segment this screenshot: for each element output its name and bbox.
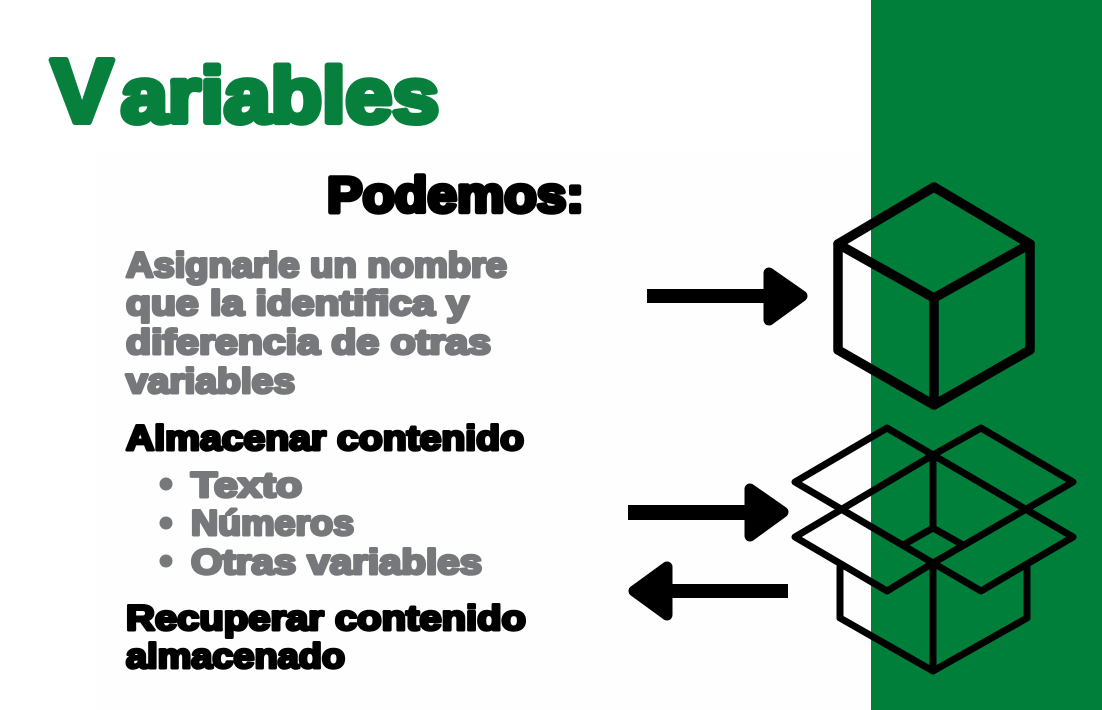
list: content types: Números <box>191 504 354 543</box>
icon: closed box <box>838 187 1030 405</box>
text block: assign a name: que la identifica y <box>126 284 470 323</box>
text block: assign a name: Asignarle un nombre <box>126 246 507 285</box>
icon: open box <box>795 428 1073 671</box>
panel: green band <box>871 0 1102 710</box>
heading: Podemos: Podemos: <box>327 167 584 223</box>
text block: retrieve content <box>126 599 526 676</box>
text block: assign a name: variables <box>126 362 295 401</box>
text block: retrieve content: Recuperar contenido <box>126 599 526 638</box>
title: V <box>51 42 113 142</box>
arrow: store into box <box>628 489 783 536</box>
arrow: retrieve from box <box>634 567 788 615</box>
arrow: name to closed box <box>647 273 802 320</box>
text block: assign a name <box>126 246 507 401</box>
title: ariables <box>121 51 439 139</box>
text block: store content: Almacenar contenido <box>126 419 524 458</box>
list: content types: Otras variables <box>191 543 482 582</box>
list: content types: Texto <box>191 466 302 505</box>
text block: assign a name: diferencia de otras <box>126 323 491 362</box>
title <box>51 42 439 142</box>
text block: retrieve content: almacenado <box>126 637 345 676</box>
list: content types <box>160 466 482 582</box>
